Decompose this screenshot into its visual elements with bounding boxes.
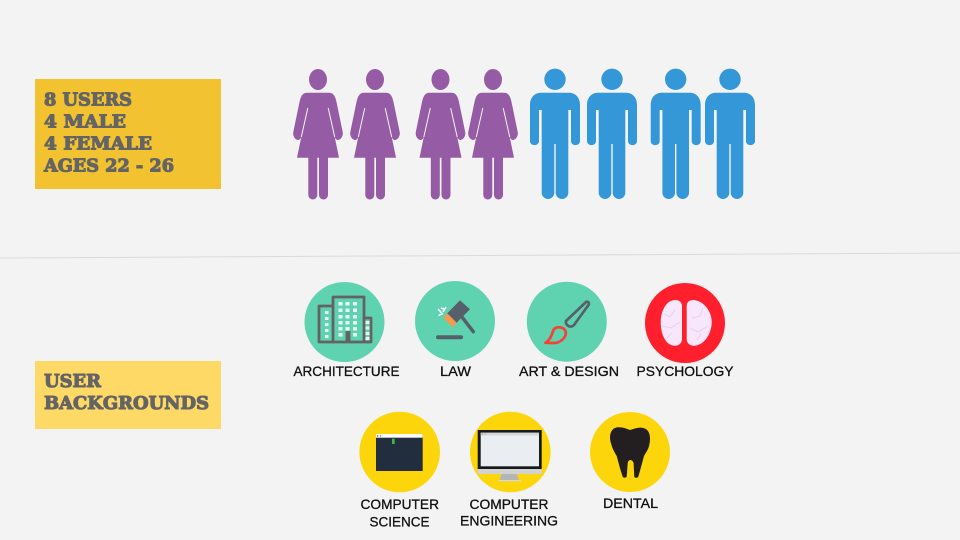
panel: user summary <box>35 79 221 189</box>
label: dental: DENTAL <box>603 495 658 511</box>
panel: user backgrounds heading: BACKGROUNDS <box>44 393 209 414</box>
female user icons <box>293 69 518 200</box>
label: psychology: PSYCHOLOGY <box>636 363 734 379</box>
label: computer science: SCIENCE <box>370 514 430 530</box>
label: law: LAW <box>440 363 472 379</box>
label: architecture: ARCHITECTURE <box>294 363 400 379</box>
icon: computer science terminal <box>359 412 440 492</box>
icon: art and design paintbrush <box>527 282 607 362</box>
icon: dental tooth <box>590 412 670 492</box>
panel: user backgrounds heading <box>35 361 221 429</box>
icon: law gavel <box>415 281 495 361</box>
label: computer engineering: COMPUTER <box>470 496 548 512</box>
panel: user backgrounds heading: USER <box>44 371 102 392</box>
label: computer engineering <box>460 496 558 529</box>
male user icons <box>530 69 755 199</box>
label: computer science: COMPUTER <box>360 496 439 512</box>
icon: computer engineering monitor <box>470 412 551 492</box>
panel: user summary: AGES 22 - 26 <box>43 156 174 176</box>
panel: user summary: 8 USERS <box>44 90 132 110</box>
label: computer science <box>360 496 439 530</box>
icon: psychology brain <box>645 283 725 363</box>
label: art and design: ART & DESIGN <box>519 363 619 379</box>
label: computer engineering: ENGINEERING <box>460 513 558 529</box>
panel: user summary: 4 MALE <box>44 112 126 132</box>
panel: user summary: 4 FEMALE <box>44 134 152 154</box>
icon: architecture <box>304 282 384 362</box>
